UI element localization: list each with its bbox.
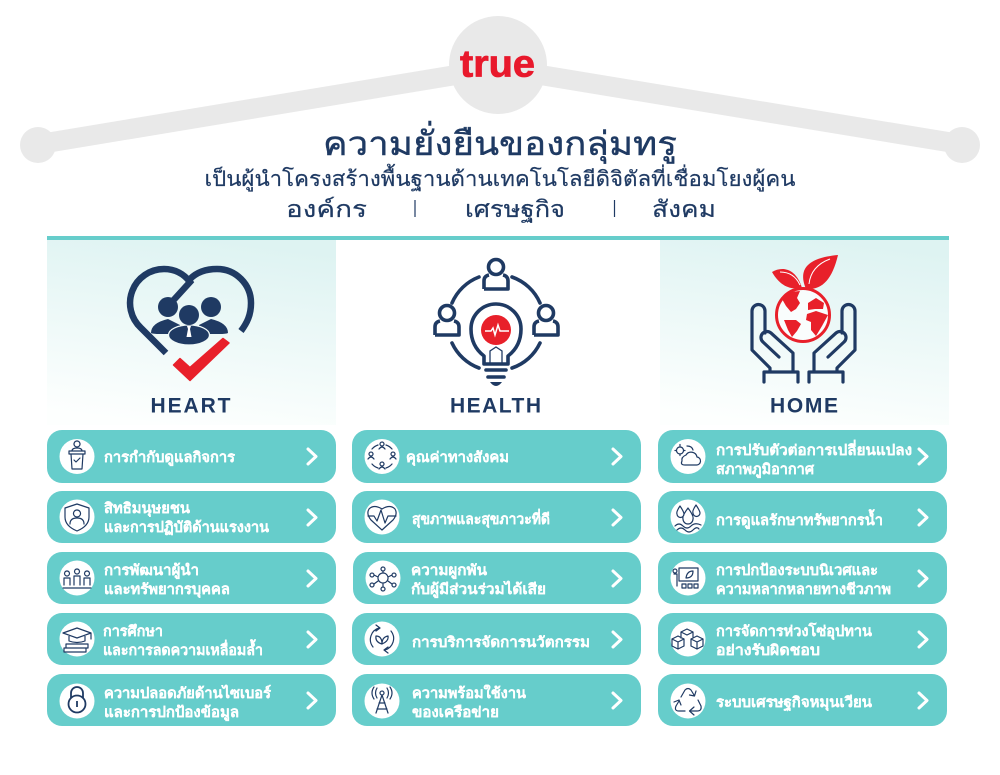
icon: network [370, 567, 396, 591]
icon: social circle [368, 442, 396, 469]
panel: home background [660, 240, 949, 425]
item: stakeholders [353, 552, 641, 604]
icon: padlock [68, 687, 86, 712]
item: cyber security [47, 674, 336, 726]
item: human rights: สิทธิมนุษยชน [104, 500, 190, 517]
icon: sun and cloud [675, 444, 701, 465]
item: water: การดูแลรักษาทรัพยากรน้ำ [716, 509, 883, 529]
item: health and wellbeing [352, 491, 641, 543]
panel: health column [352, 430, 641, 726]
true logo: true [460, 44, 535, 86]
item: innovation: การบริการจัดการนวัตกรรม [412, 634, 590, 651]
item: climate: การปรับตัวต่อการเปลี่ยนแปลง [716, 439, 912, 459]
item: biodiversity [658, 552, 947, 604]
item: governance [47, 430, 336, 483]
pillars line: เศรษฐกิจ [465, 196, 565, 223]
icon: health [435, 260, 558, 386]
item: climate [658, 430, 947, 483]
icon: leaf cycle [370, 625, 394, 653]
item: stakeholders: ความผูกพัน [411, 563, 487, 579]
icon: water drops [675, 505, 701, 532]
icon: heart pulse [368, 506, 396, 530]
icon: podium [69, 441, 85, 469]
icon: antenna tower [372, 687, 392, 713]
item: biodiversity: การปกป้องระบบนิเวศและ [716, 562, 878, 579]
icon: heart [130, 269, 251, 380]
item: network availability [352, 674, 641, 726]
pillars line: สังคม [652, 196, 716, 222]
item: water [658, 491, 947, 543]
item: supply chain [658, 613, 947, 665]
item: climate: สภาพภูมิอากาศ [716, 461, 815, 478]
heading: HOME: HOME [770, 394, 838, 418]
item: circular economy [658, 674, 947, 726]
item: cyber security: ความปลอดภัยด้านไซเบอร์ [104, 684, 271, 702]
item: network availability: ความพร้อมใช้งาน [412, 684, 526, 702]
subtitle: เป็นผู้นำโครงสร้างพื้นฐานด้านเทคโนโลยีดิจิตัลที่เชื่อมโยงผู้คน [204, 164, 796, 192]
item: circular economy: ระบบเศรษฐกิจหมุนเวียน [716, 694, 872, 712]
icon: home [752, 255, 855, 382]
item: cyber security: และการปกป้องข้อมูล [104, 704, 239, 721]
panel: heart background [47, 240, 336, 425]
icon: graduation cap [63, 628, 91, 652]
heading: HEALTH: HEALTH [450, 394, 541, 418]
item: leadership: การพัฒนาผู้นำ [104, 562, 199, 579]
item: social value: คุณค่าทางสังคม [406, 450, 509, 466]
item: biodiversity: ความหลากหลายทางชีวภาพ [716, 581, 891, 598]
item: human rights [47, 491, 336, 543]
heading: HEART: HEART [150, 394, 231, 418]
pillars line [286, 196, 716, 223]
icon: people [63, 569, 91, 588]
icon: boxes [672, 629, 703, 649]
item: supply chain: อย่างรับผิดชอบ [716, 642, 820, 659]
panel: heart column [47, 430, 336, 726]
item: governance: การกำกับดูแลกิจการ [104, 449, 235, 466]
item: supply chain: การจัดการห่วงโซ่อุปทาน [716, 622, 872, 640]
item: network availability: ของเครือข่าย [412, 704, 499, 721]
roof graphic with logo [20, 16, 980, 163]
item: leadership [47, 552, 336, 604]
title: ความยั่งยืนของกลุ่มทรู [323, 121, 677, 164]
item: social value [352, 430, 641, 483]
item: innovation [352, 613, 641, 665]
item: stakeholders: กับผู้มีส่วนร่วมได้เสีย [411, 580, 546, 598]
item: education: และการลดความเหลื่อมล้ำ [103, 639, 263, 659]
icon: shield [65, 504, 89, 531]
icon: ecosystem board [673, 568, 698, 588]
item: education: การศึกษา [103, 623, 163, 640]
teal divider [47, 236, 949, 240]
item: health and wellbeing: สุขภาพและสุขภาวะที่ดี [412, 508, 550, 528]
pillars line: องค์กร [286, 196, 367, 222]
item: leadership: และทรัพยากรบุคคล [104, 582, 230, 598]
item: human rights: และการปฏิบัติด้านแรงงาน [104, 519, 269, 536]
item: education [47, 613, 336, 665]
icon: recycle [674, 688, 701, 715]
panel: home column [658, 430, 947, 726]
